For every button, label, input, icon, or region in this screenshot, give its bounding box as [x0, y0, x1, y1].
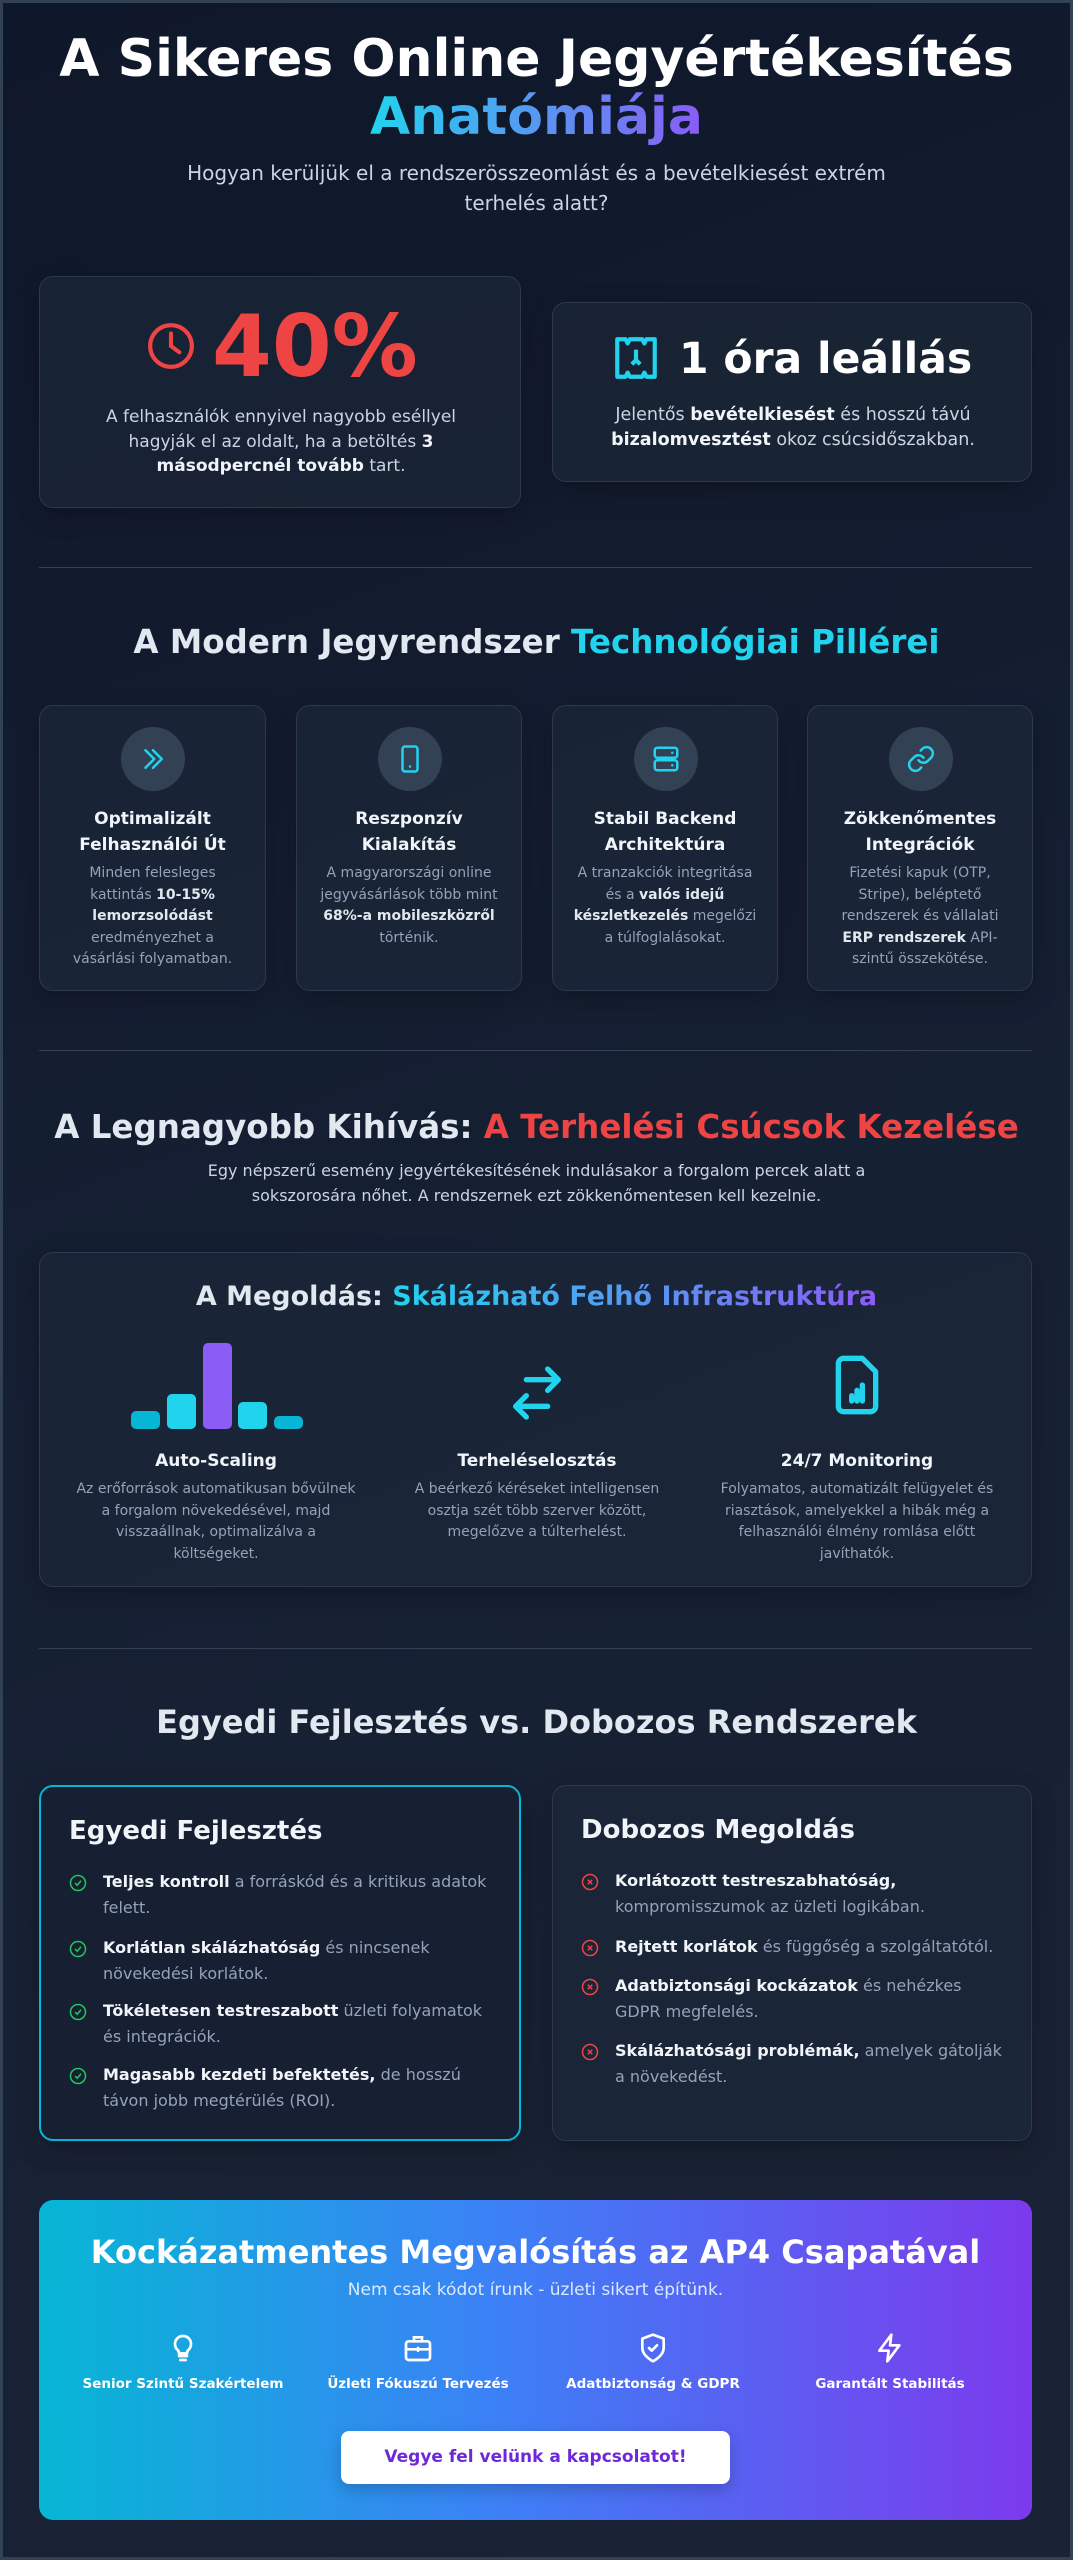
panel: custom development: Magasabb kezdeti befektetés, de hosszú távon jobb megtérülés (ROI). — [103, 2065, 461, 2110]
panel: boxed solution: Adatbiztonsági kockázatok és nehézkes GDPR megfelelés. — [615, 1976, 962, 2021]
icon: link — [889, 727, 953, 791]
title — [59, 29, 1014, 147]
panel: pillar 3: Stabil Backend Architektúra — [594, 809, 736, 855]
panel: pillar 4 — [807, 705, 1033, 991]
title: Anatómiája — [370, 87, 703, 147]
CTA title: Kockázatmentes Megvalósítás az AP4 Csapatával — [91, 2233, 980, 2271]
icon: broken ticket — [615, 337, 657, 379]
stat card: 40% — [39, 276, 521, 508]
panel: pillar 4: Fizetési kapuk (OTP, Stripe), beléptető rendszerek és vállalati ERP rendszerek API-szintű összekötése. — [841, 865, 999, 967]
panel: custom development: Teljes kontroll a forráskód és a kritikus adatok felett. — [103, 1872, 486, 1917]
panel: pillar 3 — [552, 705, 778, 991]
title: A Sikeres Online Jegyértékesítés — [59, 29, 1014, 89]
feature: senior: Senior Szintű Szakértelem — [83, 2376, 283, 2392]
item: auto-scaling: Auto-Scaling — [155, 1451, 277, 1471]
document chart icon — [836, 1356, 878, 1414]
feature: stability: Garantált Stabilitás — [815, 2376, 965, 2392]
stat text: A felhasználók ennyivel nagyobb eséllyel hagyják el az oldalt, ha a betöltés 3 másodpercnél tovább tart. — [106, 407, 456, 476]
panel: pillar 2: A magyarországi online jegyvásárlások több mint 68%-a mobileszközről történik. — [320, 865, 498, 946]
panel: boxed solution — [552, 1785, 1032, 2141]
subtitle: Hogyan kerüljük el a rendszerösszeomlást és a bevételkiesést extrém terhelés alatt? — [187, 161, 886, 215]
bar chart icon — [131, 1343, 303, 1429]
item: monitoring: 24/7 Monitoring — [781, 1451, 933, 1471]
stat number: 40% — [212, 297, 418, 397]
panel: pillar 4: Zökkenőmentes Integrációk — [844, 809, 996, 855]
panel: boxed solution: Skálázhatósági problémák, amelyek gátolják a növekedést. — [615, 2041, 1002, 2086]
item: load balancing: Terheléselosztás — [457, 1451, 617, 1471]
heading: challenge: A Legnagyobb Kihívás: A Terhelési Csúcsok Kezelése — [54, 1108, 1019, 1146]
panel: CTA — [39, 2200, 1032, 2520]
panel: custom development: Tökéletesen testreszabott üzleti folyamatok és integrációk. — [103, 2001, 482, 2046]
stat card: 1 óra leállás — [552, 302, 1032, 482]
panel: boxed solution: Rejtett korlátok és függőség a szolgáltatótól. — [615, 1937, 993, 1956]
panel: custom development — [39, 1785, 521, 2141]
panel: solution — [39, 1252, 1032, 1587]
stat heading: 1 óra leállás — [679, 335, 972, 384]
arrows icon — [513, 1366, 561, 1420]
item: monitoring: Folyamatos, automatizált felügyelet és riasztások, amelyekkel a hibák még a felhasználói élmény romlása előtt javíthatók. — [721, 1481, 993, 1562]
CTA button: Vegye fel velünk a kapcsolatot! — [384, 2447, 687, 2467]
challenge text: Egy népszerű esemény jegyértékesítésének indulásakor a forgalom percek alatt a sokszorosára nőhet. A rendszernek ezt zökkenőmentesen kell kezelnie. — [208, 1161, 865, 1205]
panel: pillar 1: Optimalizált Felhasználói Út — [79, 809, 226, 855]
panel: custom development: Egyedi Fejlesztés — [69, 1816, 322, 1846]
panel: pillar 2: Reszponzív Kialakítás — [355, 809, 463, 855]
item: auto-scaling — [76, 1343, 356, 1562]
panel: boxed solution: Dobozos Megoldás — [581, 1815, 855, 1845]
item: auto-scaling: Az erőforrások automatikusan bővülnek a forgalom növekedésével, majd visszaállnak, optimalizálva a költségeket. — [76, 1481, 356, 1562]
feature: security: Adatbiztonság & GDPR — [566, 2376, 740, 2392]
CTA button — [341, 2431, 730, 2484]
icon: chevrons — [121, 727, 185, 791]
panel: custom development: Korlátlan skálázhatóság és nincsenek növekedési korlátok. — [103, 1938, 430, 1983]
item: load balancing — [414, 1366, 659, 1540]
heading: pillars: A Modern Jegyrendszer Technológiai Pillérei — [133, 623, 940, 661]
icon: server — [634, 727, 698, 791]
panel: pillar 1 — [39, 705, 266, 991]
feature: senior — [83, 2334, 283, 2392]
panel: boxed solution: Korlátozott testreszabhatóság, kompromisszumok az üzleti logikában. — [615, 1871, 925, 1916]
feature: stability — [815, 2333, 965, 2392]
feature: business: Üzleti Fókuszú Tervezés — [327, 2376, 509, 2392]
stat text: Jelentős bevételkiesést és hosszú távú bizalomvesztést okoz csúcsidőszakban. — [611, 405, 975, 450]
panel: pillar 1: Minden felesleges kattintás 10-15% lemorzsolódást eredményezhet a vásárlási folyamatban. — [73, 865, 232, 967]
icon: clock — [148, 323, 194, 369]
item: monitoring — [721, 1356, 993, 1562]
solution heading: A Megoldás: Skálázható Felhő Infrastruktúra — [196, 1281, 877, 1312]
feature: security — [566, 2333, 740, 2392]
CTA subtitle: Nem csak kódot írunk - üzleti sikert építünk. — [348, 2280, 723, 2300]
panel: pillar 3: A tranzakciók integritása és a valós idejű készletkezelés megelőzi a túlfoglalásokat. — [574, 865, 756, 946]
item: load balancing: A beérkező kéréseket intelligensen osztja szét több szerver között, megelőzve a túlterhelést. — [415, 1481, 659, 1540]
feature: business — [327, 2336, 509, 2392]
panel: pillar 2 — [296, 705, 522, 991]
heading: comparison: Egyedi Fejlesztés vs. Dobozos Rendszerek — [156, 1703, 917, 1741]
icon: phone — [378, 727, 442, 791]
